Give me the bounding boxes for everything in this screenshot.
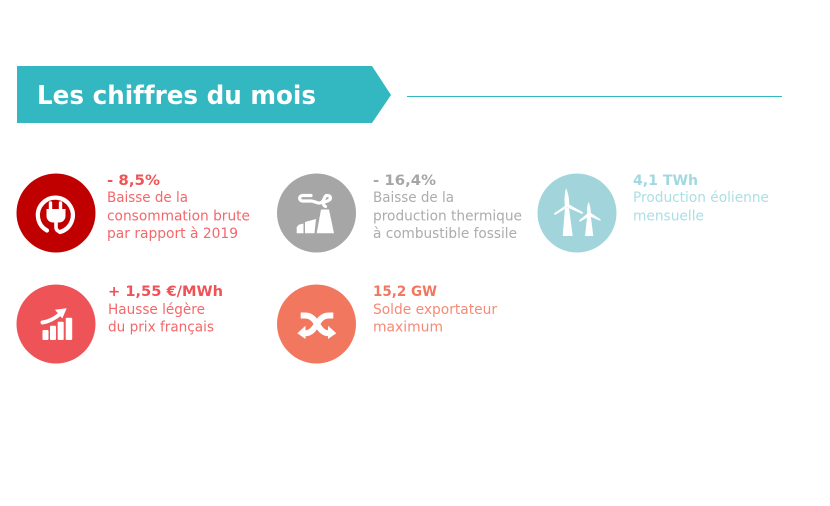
text: prix bbox=[108, 284, 223, 336]
text: prix: + 1,55 €/MWh bbox=[108, 284, 223, 300]
text: thermique: à combustible fossile bbox=[373, 226, 517, 242]
panel: éolien bbox=[538, 173, 769, 252]
text: solde exportateur: 15,2 GW bbox=[373, 284, 437, 300]
text: thermique: production thermique bbox=[373, 208, 522, 224]
text: solde exportateur: maximum bbox=[373, 320, 443, 336]
title banner bbox=[17, 66, 391, 123]
title banner: Les chiffres du mois bbox=[37, 81, 316, 111]
text: consommation: consommation brute bbox=[107, 208, 250, 224]
text: solde exportateur bbox=[373, 284, 497, 336]
text: consommation bbox=[107, 173, 250, 242]
text: prix: Hausse légère bbox=[108, 302, 205, 318]
text: éolien: 4,1 TWh bbox=[633, 173, 698, 189]
text: solde exportateur: Solde exportateur bbox=[373, 302, 497, 318]
icon: factory bbox=[277, 174, 356, 252]
panel: prix bbox=[16, 284, 223, 364]
icon: wind turbines bbox=[538, 174, 616, 252]
text: éolien: mensuelle bbox=[633, 208, 704, 224]
text: consommation: - 8,5% bbox=[107, 173, 160, 189]
text: prix: du prix français bbox=[108, 320, 214, 336]
text: thermique: Baisse de la bbox=[373, 190, 454, 206]
text: consommation: Baisse de la bbox=[107, 190, 188, 206]
text: éolien bbox=[633, 173, 769, 224]
header rule bbox=[407, 96, 782, 98]
text: éolien: Production éolienne bbox=[633, 190, 769, 206]
text: thermique: - 16,4% bbox=[373, 173, 436, 189]
panel: thermique bbox=[277, 173, 522, 252]
panel: solde exportateur bbox=[277, 284, 497, 364]
text: thermique bbox=[373, 173, 522, 242]
icon: plug bbox=[16, 174, 96, 252]
text: consommation: par rapport à 2019 bbox=[107, 226, 238, 242]
panel: consommation bbox=[16, 173, 250, 252]
icon: rising bars bbox=[16, 284, 96, 364]
icon: crossing arrows bbox=[277, 284, 356, 364]
